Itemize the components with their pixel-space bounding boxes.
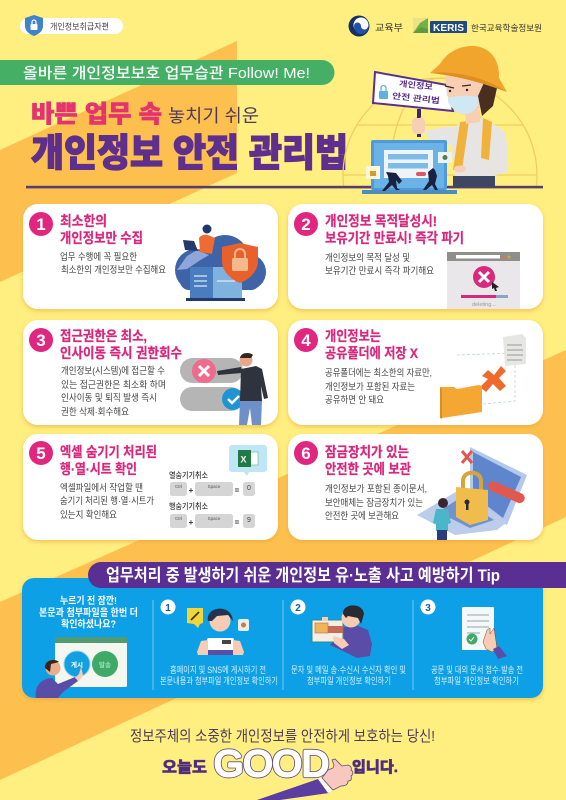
number 2: 2 xyxy=(301,215,311,234)
logos: KERIS xyxy=(433,23,464,34)
tip 3: 3 xyxy=(425,603,431,614)
number 3 xyxy=(29,328,53,352)
closing slogan: 입니다. xyxy=(352,758,398,776)
body: 보안매체는 잠금장치가 있는 xyxy=(325,497,423,509)
number 6: 6 xyxy=(301,444,311,463)
number 5 xyxy=(29,441,53,465)
panel: card 2 xyxy=(288,204,543,309)
body: 개인정보가 포함된 종이문서, xyxy=(325,483,427,495)
caption 2 xyxy=(291,664,406,686)
closing slogan xyxy=(162,743,398,800)
tips heading band: 업무처리 중 발생하기 쉬운 개인정보 유·노출 사고 예방하기 Tip xyxy=(106,566,500,585)
body xyxy=(325,368,432,406)
caption 2: 문자 및 메일 송·수신시 수신자 확인 및 xyxy=(291,664,406,675)
icon: thumbs up xyxy=(257,759,353,800)
caption 1 xyxy=(160,664,278,686)
heading: 잠금장치가 있는 xyxy=(325,444,409,460)
number 2 xyxy=(294,212,318,236)
shortcut: row: + xyxy=(189,518,194,527)
heading: 개인정보는 xyxy=(325,328,381,344)
callout: check before pressing: 확인하셨나요? xyxy=(61,618,116,630)
number 4: 4 xyxy=(301,331,311,350)
tip 2: 2 xyxy=(295,603,301,614)
logos: 한국교육학술정보원 xyxy=(471,23,542,33)
body: 개인정보가 포함된 자료는 xyxy=(325,381,415,393)
shortcut: column: + xyxy=(189,486,194,495)
caption 3: 첨부파일 개인정보 확인하기 xyxy=(434,675,519,686)
caption 2: 첨부파일 개인정보 확인하기 xyxy=(307,675,391,686)
illustration: worker with sign and laptop: 안전 관리법 xyxy=(392,91,440,105)
body: 있는지 확인해요 xyxy=(60,509,117,521)
heading: 엑셀 숨기기 처리된 xyxy=(60,444,157,460)
closing slogan: GOOD xyxy=(214,743,329,784)
number 1 xyxy=(29,212,53,236)
tips heading band xyxy=(88,562,566,588)
icon: cloud shield laptop xyxy=(175,224,266,301)
caption 3 xyxy=(431,664,523,686)
shortcut: row: = xyxy=(235,518,240,527)
icon: post or send window xyxy=(36,637,127,698)
body: 업무 수행에 꼭 필요한 xyxy=(60,251,137,263)
icon: deleting window: deleting... xyxy=(472,302,496,308)
shortcut: column: 0 xyxy=(247,485,251,492)
body xyxy=(325,483,427,522)
green banner: 올바른 개인정보보호 업무습관 Follow! Me! xyxy=(23,65,310,82)
shortcut: column: 열숨기기취소 xyxy=(169,471,208,480)
logos: 교육부 xyxy=(375,23,403,34)
number 5: 5 xyxy=(36,444,46,463)
body xyxy=(325,252,434,277)
shortcut: column: Space xyxy=(208,484,221,489)
callout: check before pressing xyxy=(39,594,138,630)
heading: 행·열·시트 확인 xyxy=(60,461,137,477)
closing slogan: GOOD xyxy=(214,743,329,784)
number 6 xyxy=(294,441,318,465)
callout: check before pressing: 누르기 전 잠깐! xyxy=(60,594,117,607)
heading: 인사이동 즉시 권한회수 xyxy=(60,345,182,361)
body xyxy=(61,365,166,418)
heading xyxy=(60,444,157,477)
shortcut: row: 행숨기기취소 xyxy=(169,501,208,511)
badge: audience xyxy=(20,15,123,36)
shortcut: row: Space xyxy=(208,516,221,521)
icon: padlock laptop xyxy=(417,447,527,540)
heading: 접근권한은 최소, xyxy=(60,328,147,344)
shortcut: row: 9 xyxy=(247,517,251,524)
icon: folder and document xyxy=(440,334,526,419)
caption 1: 홈페이지 및 SNS에 게시하기 전 xyxy=(170,664,266,675)
subtitle: 바쁜 업무 속 xyxy=(31,101,162,128)
icon: post or send window: 게시 xyxy=(71,660,83,669)
icon: excel bubble xyxy=(229,445,267,476)
icon: excel bubble: X xyxy=(240,454,247,464)
tip 2 xyxy=(290,600,372,658)
subtitle xyxy=(31,101,259,128)
tip 3 xyxy=(420,600,507,659)
heading xyxy=(325,213,464,246)
caption 1: 본문내용과 첨부파일 개인정보 확인하기 xyxy=(160,675,278,686)
subtitle: 놓치기 쉬운 xyxy=(168,106,259,126)
icon: post or send window: 발송 xyxy=(99,660,111,669)
panel: tips xyxy=(22,578,543,698)
title: 개인정보 안전 관리법 xyxy=(31,133,348,175)
caption 3: 공문 및 대외 문서 접수·발송 전 xyxy=(431,664,523,675)
heading xyxy=(60,328,182,361)
heading xyxy=(60,213,143,246)
illustration: worker with sign and laptop: 개인정보 xyxy=(399,78,434,92)
body: 있는 접근권한은 최소화 하며 xyxy=(61,379,166,391)
heading: 개인정보 목적달성시! xyxy=(325,213,437,229)
callout: check before pressing: 본문과 첨부파일을 한번 더 xyxy=(39,606,138,619)
body: 권한 삭제·회수해요 xyxy=(61,406,129,418)
badge: audience: 개인정보취급자편 xyxy=(50,22,109,32)
body: 최소한의 개인정보만 수집해요 xyxy=(61,264,166,276)
panel: card 5 xyxy=(23,434,278,540)
shortcut: row xyxy=(169,501,255,528)
icon: toggles and man xyxy=(180,353,268,425)
body xyxy=(60,482,154,521)
shortcut: column xyxy=(169,471,255,496)
panel: card 3 xyxy=(23,320,278,425)
heading: 최소한의 xyxy=(60,213,107,229)
logos xyxy=(348,16,542,36)
body: 개인정보(시스템)에 접근할 수 xyxy=(61,365,165,377)
green banner xyxy=(0,60,334,85)
closing line: 정보주체의 소중한 개인정보를 안전하게 보호하는 당신! xyxy=(130,728,435,745)
shortcut: row: Ctrl xyxy=(175,516,182,521)
body: 공유하면 안 돼요 xyxy=(325,394,384,406)
number 4 xyxy=(294,328,318,352)
heading: 보유기간 만료시! 즉각 파기 xyxy=(325,230,464,246)
body: 개인정보의 목적 달성 및 xyxy=(325,252,410,264)
tip 1 xyxy=(160,600,249,655)
body: 숨기기 처리된 행·열·시트가 xyxy=(60,495,154,507)
body: 인사이동 및 퇴직 발생 즉시 xyxy=(61,392,157,404)
number 1: 1 xyxy=(36,215,46,234)
body: 공유폴더에는 최소한의 자료만, xyxy=(325,368,432,379)
body xyxy=(60,251,166,276)
panel: card 1 xyxy=(23,204,278,309)
number 3: 3 xyxy=(36,331,46,350)
heading: 안전한 곳에 보관 xyxy=(325,461,411,477)
shortcut: column: Ctrl xyxy=(175,484,182,489)
body: 엑셀파일에서 작업할 땐 xyxy=(60,482,143,494)
closing slogan: 오늘도 xyxy=(162,759,207,776)
heading xyxy=(325,444,411,477)
panel: card 4 xyxy=(288,320,543,425)
body: 보유기간 만료시 즉각 파기해요 xyxy=(325,265,434,277)
panel: card 6 xyxy=(288,434,543,540)
shortcut: column: = xyxy=(235,486,240,495)
illustration: worker with sign and laptop xyxy=(26,46,543,194)
heading xyxy=(325,328,419,361)
icon: deleting window xyxy=(447,252,520,309)
heading: 개인정보만 수집 xyxy=(60,230,143,246)
body: 안전한 곳에 보관해요 xyxy=(325,510,399,522)
tip 1: 1 xyxy=(165,603,171,614)
heading: 공유폴더에 저장 X xyxy=(325,345,419,361)
